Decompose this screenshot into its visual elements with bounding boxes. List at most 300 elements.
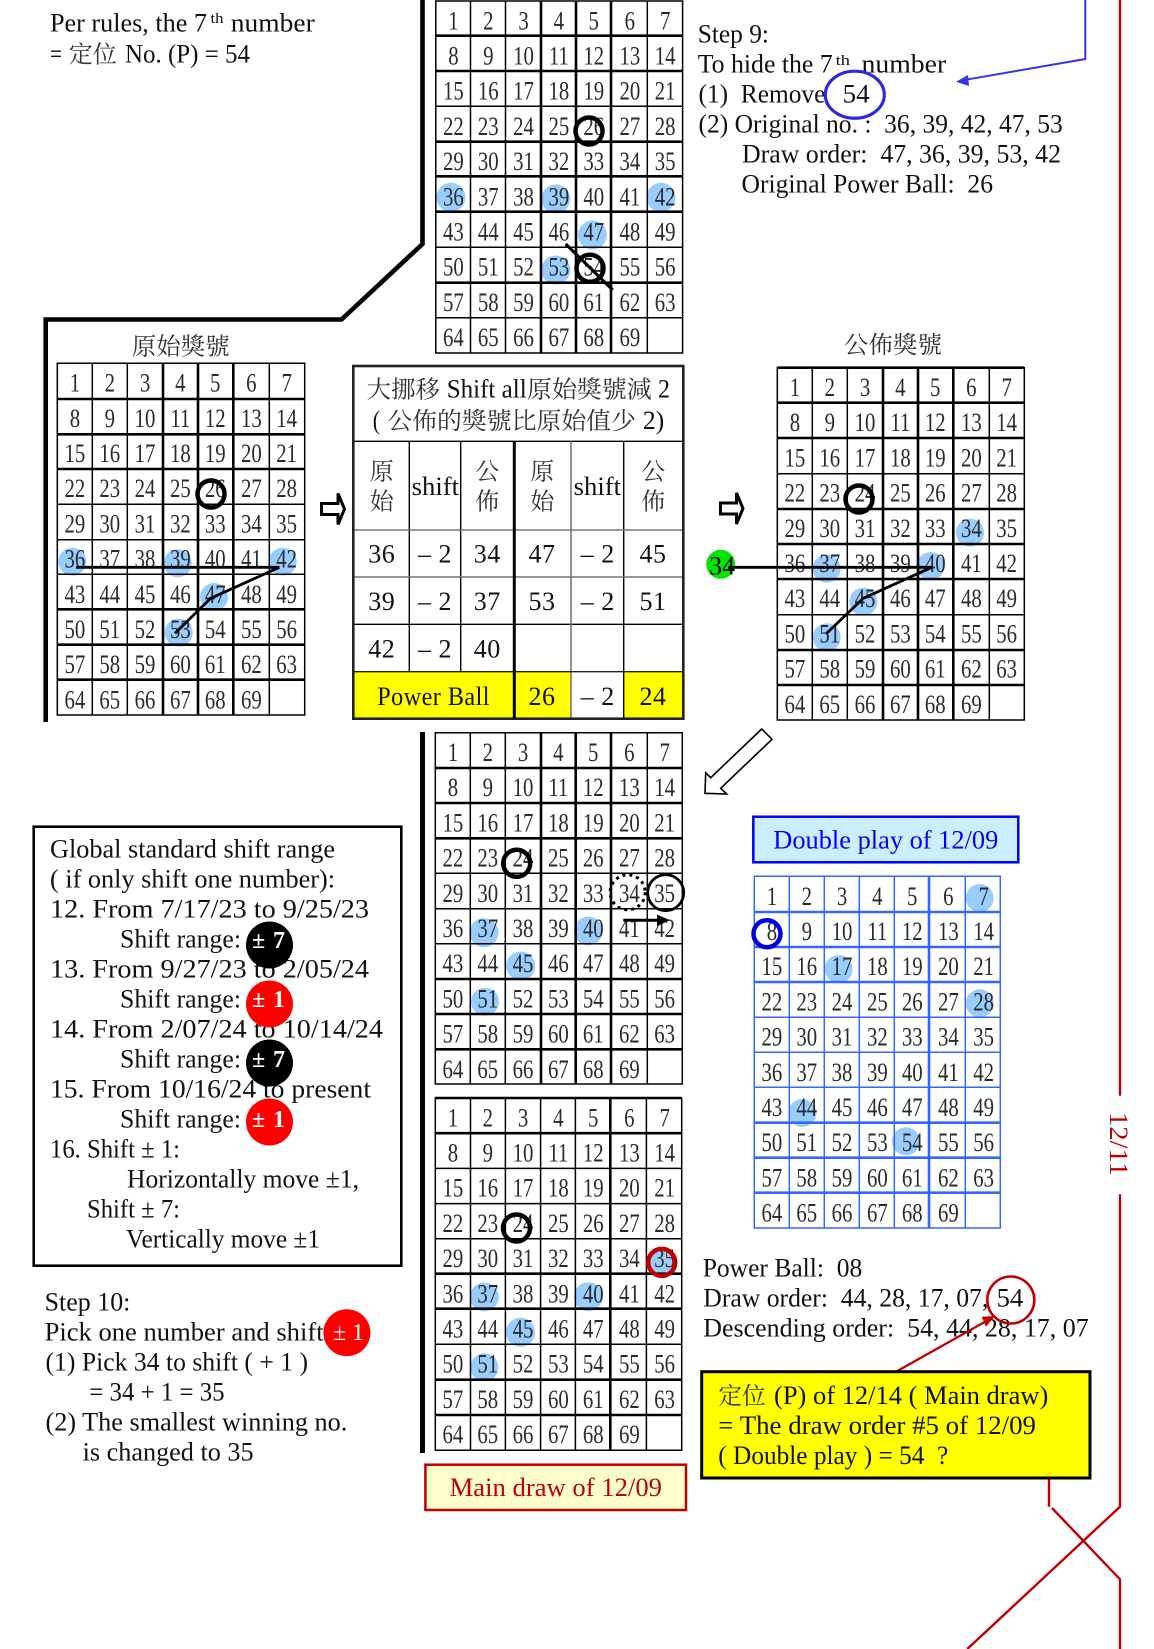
number cells: 40 (583, 1280, 604, 1309)
number cells: 40 (583, 915, 604, 944)
number cells: 4 (872, 883, 883, 911)
number cells: 13 (938, 918, 959, 947)
blue circle around 54 (825, 71, 884, 118)
number cells: 31 (513, 148, 534, 177)
column headers: 原 (370, 452, 394, 487)
number cells: 45 (513, 1315, 533, 1344)
number cells: 16 (477, 1175, 498, 1203)
number cells: 28 (654, 1210, 675, 1239)
number cells: 67 (548, 324, 569, 353)
number cells: 2 (825, 374, 835, 403)
number cells: 63 (996, 656, 1017, 684)
highlighted winning numbers (788, 884, 994, 1155)
number cells: 27 (619, 845, 640, 873)
label: main draw of 12/09: Main draw of 12/09 (450, 1473, 662, 1502)
number cells: 54 (925, 620, 946, 649)
number cells: 10 (513, 1139, 533, 1168)
grid: original numbers top (436, 1, 683, 353)
number cells: 23 (819, 480, 840, 508)
number cells: 22 (65, 475, 85, 504)
number cells: 16 (477, 809, 498, 838)
table: shift all minus 2 (353, 366, 683, 719)
text: per rules the 7th number: th (210, 11, 224, 27)
number cells: 53 (890, 620, 911, 649)
power ball ring and draw pattern line (76, 480, 279, 633)
number cells: 55 (619, 985, 640, 1014)
number cells: 63 (276, 651, 297, 680)
number cells: 41 (619, 183, 640, 212)
number cells: 35 (973, 1024, 994, 1052)
text: double play draw info (703, 1254, 1089, 1343)
number cells: 18 (867, 953, 888, 982)
number cells: 34 (619, 880, 640, 908)
number cells: 17 (832, 953, 853, 982)
number cells: 56 (654, 1351, 675, 1379)
number cells: 38 (855, 550, 875, 579)
table data: 34 (474, 540, 501, 569)
number cells: 68 (583, 324, 604, 353)
number cells: 3 (518, 7, 529, 36)
column headers: shift (412, 472, 460, 501)
number cells: 8 (448, 1139, 458, 1168)
table heading: 2) (643, 406, 664, 435)
grid: announced numbers (706, 368, 1024, 720)
text: step 9: number (862, 50, 947, 79)
draw pattern line (728, 567, 932, 633)
number cells: 14 (276, 405, 297, 433)
table data: 37 (474, 587, 501, 616)
callout: yellow question box: ( Double play ) = 54 ? (718, 1441, 948, 1470)
number cells: 42 (973, 1059, 994, 1087)
number cells: 17 (513, 78, 534, 106)
number cells: 6 (246, 370, 257, 398)
number cells: 42 (655, 183, 676, 212)
number cells: 39 (170, 546, 191, 574)
number cells: 44 (477, 1315, 498, 1344)
number cells: 57 (443, 1021, 464, 1049)
number cells: 59 (832, 1164, 852, 1193)
number cells: 6 (966, 374, 977, 403)
number cells: 4 (553, 1104, 564, 1133)
number cells: 31 (513, 880, 533, 908)
number cells: 52 (513, 985, 533, 1014)
table heading: 大挪移 (367, 370, 440, 405)
panel: global standard shift range: Global standard shift range (50, 834, 335, 864)
number cells: 27 (961, 480, 982, 508)
number cells: 7 (281, 370, 292, 398)
number cells: 36 (443, 915, 464, 944)
number cells: 11 (890, 409, 910, 438)
text: step 10: is changed to 35 (83, 1438, 254, 1467)
badge: shift 1: ±1 (252, 987, 285, 1013)
text: per rules the 7th number: = (50, 40, 62, 68)
table data: 36 (368, 540, 395, 569)
number cells: 34 (961, 515, 982, 543)
number cells: 14 (996, 409, 1017, 438)
number cells: 31 (832, 1024, 852, 1052)
number cells: 6 (624, 739, 635, 768)
panel: global standard shift range: Shift range: (120, 1104, 241, 1134)
number cells: 37 (477, 1280, 498, 1309)
number cells: 36 (443, 183, 464, 212)
number cells: 29 (443, 1245, 463, 1274)
number cells: 25 (867, 988, 888, 1017)
number cells: 34 (619, 148, 640, 177)
number cells: 14 (654, 774, 675, 803)
number cells: 7 (978, 883, 989, 911)
text: step 9: (2) Original no. : 36, 39, 42, 47, 53 (698, 110, 1063, 139)
number cells: 66 (513, 324, 534, 353)
number cells: 51 (478, 254, 499, 282)
number cells: 66 (832, 1200, 853, 1228)
number cells: 64 (443, 324, 464, 353)
number cells: 27 (619, 113, 640, 142)
table data: – 2 (417, 540, 452, 569)
column headers: 佈 (641, 482, 665, 517)
number cells: 46 (548, 950, 569, 979)
number cells: 67 (890, 691, 911, 719)
highlighted winning numbers (813, 519, 984, 651)
number cells: 17 (513, 809, 534, 838)
number cells: 24 (855, 480, 876, 508)
number cells: 12 (925, 409, 946, 438)
number cells: 59 (513, 1021, 533, 1049)
table data: 26 (528, 682, 556, 711)
number cells: 1 (448, 1104, 458, 1133)
number cells: 10 (832, 918, 852, 947)
number cells: 55 (938, 1129, 959, 1158)
number cells (443, 1104, 675, 1450)
number cells: 57 (762, 1164, 783, 1193)
number cells: 28 (655, 113, 676, 142)
label: main draw of 12/09 (425, 1465, 686, 1510)
grid: main draw result (435, 1098, 682, 1450)
number cells: 21 (654, 809, 675, 838)
number cells: 9 (483, 774, 493, 803)
number cells: 66 (135, 686, 156, 715)
number cells: 60 (890, 656, 911, 684)
number cells: 62 (619, 1021, 640, 1049)
number cells: 7 (660, 7, 671, 36)
number cells: 33 (583, 1245, 604, 1274)
number cells: 31 (855, 515, 875, 543)
number cells: 39 (548, 183, 569, 212)
number cells: 7 (659, 1104, 670, 1133)
number cells: 40 (902, 1059, 923, 1087)
vertical black divider (420, 732, 425, 1453)
number cells: 29 (443, 148, 464, 177)
number cells: 38 (832, 1059, 852, 1087)
column headers: shift (574, 472, 622, 501)
number cells: 63 (655, 289, 676, 318)
number cells: 57 (65, 651, 86, 680)
number cells: 11 (548, 774, 568, 803)
highlighted winning numbers (436, 183, 675, 284)
number cells: 68 (583, 1056, 604, 1084)
badge: step 10 shift 1 (323, 1309, 370, 1356)
number cells: 5 (907, 883, 917, 911)
number cells: 49 (654, 950, 675, 979)
number cells: 55 (619, 254, 640, 282)
number cells: 26 (583, 113, 604, 142)
panel: global standard shift range: 14. From 2/07/24 to 10/14/24 (50, 1014, 383, 1044)
badge: shift 1 second (246, 1098, 293, 1146)
number cells: 12 (583, 774, 604, 803)
number cells: 1 (448, 739, 458, 768)
number cells: 25 (548, 1210, 569, 1239)
number cells: 67 (548, 1056, 569, 1084)
number cells: 1 (448, 7, 459, 36)
number cells: 29 (785, 515, 805, 543)
number cells: 9 (105, 405, 115, 433)
number cells: 42 (654, 915, 675, 944)
number cells: 51 (99, 616, 120, 645)
number cells: 20 (619, 78, 640, 106)
table heading: 2 (658, 375, 670, 404)
number cells: 60 (867, 1164, 888, 1193)
number cells: 38 (135, 546, 155, 574)
text: step 9: 54 (843, 80, 870, 109)
number cells: 39 (548, 1280, 569, 1309)
number cells: 41 (938, 1059, 959, 1087)
number cells: 37 (99, 546, 120, 574)
number cells: 16 (99, 440, 120, 469)
number cells: 5 (588, 739, 598, 768)
number cells: 33 (583, 880, 604, 908)
number cells: 30 (477, 1245, 498, 1274)
number cells: 2 (802, 883, 812, 911)
number cells: 45 (855, 585, 875, 614)
number cells: 10 (513, 42, 534, 71)
dotted ring on 34 (610, 875, 645, 910)
number cells: 10 (135, 405, 155, 433)
number cells: 1 (767, 883, 777, 911)
number cells: 19 (902, 953, 923, 982)
number cells: 64 (443, 1056, 464, 1084)
number cells: 48 (619, 1315, 640, 1344)
number cells: 13 (619, 774, 640, 803)
number cells: 51 (477, 1351, 498, 1379)
number cells: 8 (448, 774, 458, 803)
number cells: 49 (655, 218, 676, 247)
number cells: 18 (548, 78, 569, 106)
number cells: 61 (583, 1386, 604, 1415)
number cells: 33 (902, 1024, 923, 1052)
table data: 51 (640, 587, 666, 616)
number cells: 47 (902, 1094, 923, 1123)
number cells: 11 (867, 918, 887, 947)
number cells: 62 (961, 656, 982, 684)
number cells (65, 370, 297, 715)
number cells: 17 (855, 444, 876, 473)
text: step 9: To hide the 7 (698, 50, 833, 79)
grid: original numbers left (57, 363, 305, 715)
text: double play draw info: Draw order: 44, 28, 17, 07, (703, 1284, 988, 1313)
number cells: 31 (135, 510, 155, 539)
number cells: 10 (513, 774, 533, 803)
number cells: 1 (70, 370, 80, 398)
number cells: 53 (548, 254, 569, 282)
number cells: 41 (961, 550, 982, 579)
text: per rules the 7th number: Per rules, the 7 (50, 9, 207, 38)
number cells: 22 (785, 480, 805, 508)
number cells: 35 (276, 510, 297, 539)
number cells: 7 (1001, 374, 1012, 403)
panel: global standard shift range: Shift range: (120, 924, 241, 954)
table data: 45 (640, 540, 666, 569)
number cells: 46 (548, 218, 569, 247)
number cells: 24 (832, 988, 853, 1017)
number cells: 37 (819, 550, 840, 579)
number cells: 60 (548, 289, 569, 318)
power ball ring 24 (503, 850, 530, 877)
number cells: 9 (483, 1139, 493, 1168)
number cells (762, 883, 994, 1228)
number cells: 68 (902, 1200, 923, 1228)
callout: yellow question box: (P) of 12/14 ( Main draw) (774, 1381, 1048, 1410)
text: double play draw info: 54 (997, 1284, 1023, 1313)
number cells: 19 (583, 809, 604, 838)
number cells: 32 (170, 510, 191, 539)
number cells: 69 (961, 691, 982, 719)
number cells: 59 (513, 289, 534, 318)
grid: double play (754, 876, 1000, 1228)
power ball ring 26 and removed 54 (566, 118, 613, 290)
table data: 42 (368, 634, 395, 663)
number cells: 65 (796, 1200, 817, 1228)
number cells: 64 (762, 1200, 783, 1228)
number cells: 68 (205, 686, 226, 715)
number cells: 64 (785, 691, 806, 719)
number cells: 2 (483, 1104, 493, 1133)
number cells: 54 (583, 254, 604, 282)
number cells: 53 (170, 616, 191, 645)
number cells: 25 (170, 475, 191, 504)
number cells: 51 (477, 985, 498, 1014)
number cells: 18 (548, 809, 569, 838)
number cells: 58 (478, 289, 499, 318)
number cells: 39 (548, 915, 569, 944)
number cells (443, 739, 675, 1084)
number cells: 18 (548, 1175, 569, 1203)
number cells (785, 374, 1017, 719)
number cells: 62 (619, 1386, 640, 1415)
callout: yellow question box: = The draw order #5 of 12/09 (718, 1411, 1036, 1440)
number cells: 35 (996, 515, 1017, 543)
number cells: 8 (448, 42, 459, 71)
number cells: 21 (996, 444, 1017, 473)
number cells: 49 (276, 581, 297, 609)
column headers: 公 (475, 452, 499, 487)
number cells: 32 (890, 515, 911, 543)
panel: global standard shift range: Shift ± 7: (87, 1194, 180, 1224)
text: per rules the 7th number: number (231, 9, 315, 38)
text: double play draw info: Descending order: 54, 44, 28, 17, 07 (703, 1314, 1089, 1343)
table data: Power Ball (377, 682, 490, 711)
number cells: 49 (654, 1315, 675, 1344)
number cells: 27 (938, 988, 959, 1017)
number cells: 15 (65, 440, 85, 469)
number cells: 36 (65, 546, 86, 574)
number cells: 3 (518, 739, 528, 768)
table data: 39 (368, 587, 395, 616)
yellow cells (353, 672, 683, 719)
number cells: 60 (548, 1021, 569, 1049)
number cells: 15 (762, 953, 782, 982)
number cells: 12 (583, 1139, 604, 1168)
number cells: 52 (513, 254, 534, 282)
text: per rules the 7th number: 定位 (69, 34, 117, 70)
number cells: 57 (443, 289, 464, 318)
number cells: 26 (925, 480, 946, 508)
red circle around 54 (987, 1276, 1034, 1324)
number cells: 15 (785, 444, 805, 473)
number cells: 61 (925, 656, 946, 684)
number cells: 4 (554, 7, 564, 36)
number cells: 43 (443, 950, 463, 979)
number cells: 38 (513, 915, 533, 944)
number cells: 28 (276, 475, 297, 504)
hollow arrow right 2 (720, 493, 743, 524)
text: step 9: Draw order: 47, 36, 39, 53, 42 (742, 140, 1061, 169)
number cells: 56 (973, 1129, 994, 1158)
number cells: 38 (513, 183, 534, 212)
number cells: 51 (819, 620, 840, 649)
number cells: 21 (654, 1175, 675, 1203)
panel: global standard shift range: Shift range: (120, 984, 241, 1014)
number cells: 44 (819, 585, 840, 614)
number cells: 30 (819, 515, 840, 543)
number cells: 15 (443, 78, 464, 106)
number cells: 37 (477, 915, 498, 944)
number cells: 5 (930, 374, 940, 403)
thick black connector line top-left (46, 0, 422, 722)
number cells: 16 (819, 444, 840, 473)
number cells: 40 (583, 183, 604, 212)
number cells: 49 (973, 1094, 994, 1123)
panel: global standard shift range: 12. From 7/17/23 to 9/25/23 (50, 894, 369, 924)
number cells: 5 (589, 7, 599, 36)
number cells: 32 (548, 1245, 569, 1274)
number cells (443, 7, 676, 353)
number cells: 41 (241, 546, 262, 574)
text: step 9: Step 9: (698, 19, 769, 48)
red timeline with date 12/11 (967, 0, 1133, 1649)
text: double play draw info: Power Ball: 08 (703, 1254, 862, 1283)
table data (368, 540, 666, 711)
number cells: 26 (583, 1210, 604, 1239)
table data: – 2 (580, 540, 615, 569)
number cells: 58 (99, 651, 120, 680)
number cells: 1 (790, 374, 800, 403)
number cells: 29 (762, 1024, 782, 1052)
number cells: 17 (513, 1175, 534, 1203)
table data: – 2 (417, 634, 452, 663)
number cells: 20 (241, 440, 262, 469)
number cells: 22 (762, 988, 782, 1017)
number cells: 24 (135, 475, 156, 504)
number cells: 48 (961, 585, 982, 614)
panel: global standard shift range: 15. From 10/16/24 to present (50, 1074, 372, 1104)
text: step 9: th (836, 53, 851, 69)
number cells: 69 (619, 1056, 640, 1084)
number cells: 64 (443, 1421, 464, 1450)
panel: global standard shift range: Horizontally move ±1, (127, 1164, 359, 1194)
number cells: 57 (785, 656, 806, 684)
number cells: 29 (65, 510, 85, 539)
number cells: 47 (583, 950, 604, 979)
number cells: 15 (443, 1175, 463, 1203)
